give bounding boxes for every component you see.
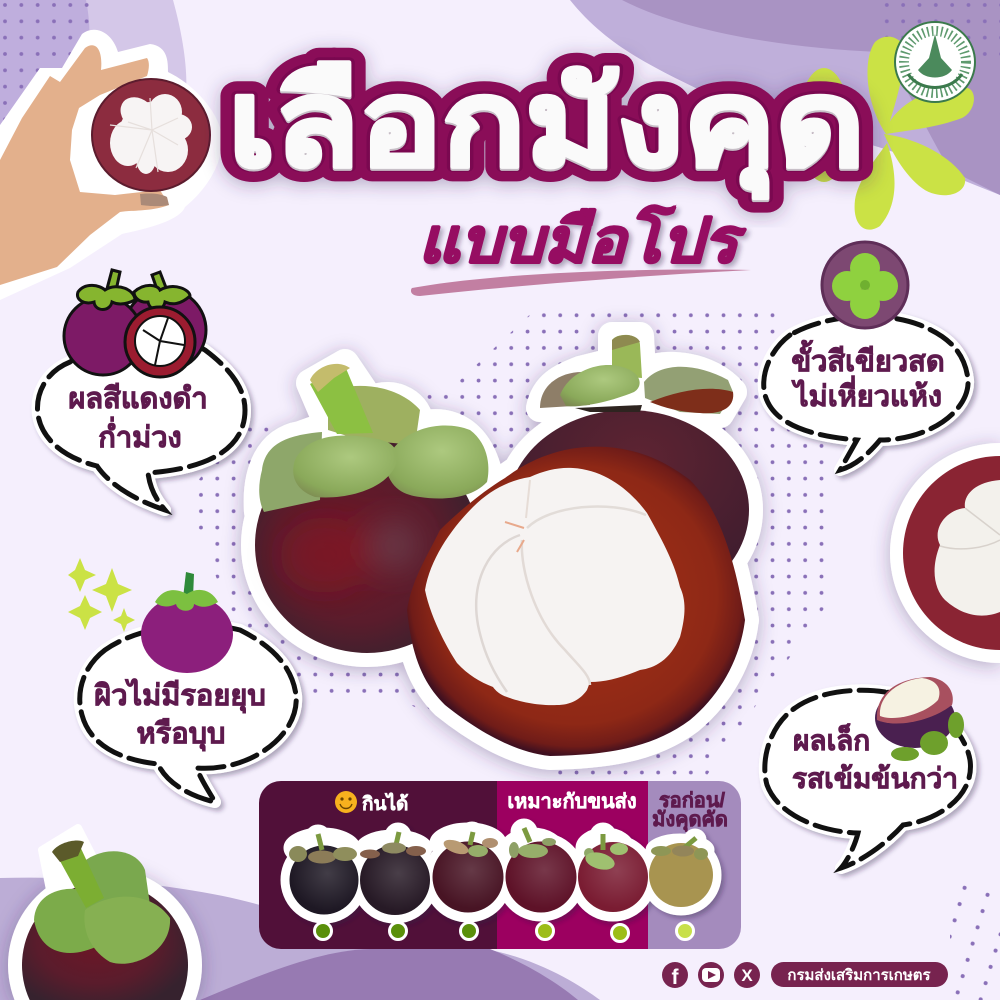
callout: small fruit bbox=[765, 677, 970, 868]
fruit stems bbox=[318, 828, 696, 850]
callout: green stem bbox=[764, 242, 968, 470]
white flesh bbox=[425, 468, 684, 705]
fruit bodies bbox=[290, 842, 713, 915]
icon: two mangosteens bbox=[64, 270, 206, 377]
label: wait / sorted: รอก่อน/ bbox=[659, 790, 725, 812]
fruit calyxes bbox=[289, 837, 708, 873]
ripeness dots bbox=[314, 922, 694, 942]
callout text: ขั้วสีเขียวสด bbox=[791, 339, 945, 378]
right cut fruit sticker bbox=[890, 443, 1000, 663]
footer social icons bbox=[662, 962, 760, 989]
white sticker backing bbox=[282, 820, 720, 922]
main mangosteen photo bbox=[255, 335, 749, 756]
title: เลือกมังคุด bbox=[228, 57, 865, 199]
background blobs top-right bbox=[570, 0, 1000, 195]
callout text: ผิวไม่มีรอยยุบ bbox=[94, 678, 266, 713]
back calyx bbox=[540, 335, 733, 414]
label: for shipping: เหมาะกับขนส่ง bbox=[507, 791, 637, 813]
cut fruit in hand bbox=[92, 79, 210, 191]
icon: whole mangosteen bbox=[141, 572, 233, 673]
dot field behind main fruit bbox=[190, 305, 1000, 1000]
callout text: ผลสีแดงดำ bbox=[68, 383, 208, 415]
callout text: ไม่เหี่ยวแห้ง bbox=[791, 375, 942, 413]
icon: cut mangosteen bbox=[875, 677, 964, 761]
panel segments bbox=[259, 781, 741, 949]
callout text: ก่ำม่วง bbox=[98, 416, 182, 454]
label: wait / sorted: มังคุดคัด bbox=[652, 809, 728, 832]
callout text: หรือบุบ bbox=[137, 718, 225, 751]
agency emblem bbox=[895, 22, 975, 102]
left fruit calyx bbox=[259, 364, 488, 512]
lime petals behind title bbox=[798, 37, 974, 230]
sticker outline bbox=[255, 336, 749, 756]
sparkles bbox=[68, 558, 135, 632]
hand holding cut mangosteen bbox=[0, 30, 222, 300]
callout: skin bbox=[80, 572, 296, 802]
icon: green clover on fruit bbox=[822, 242, 908, 328]
icon: smile bbox=[335, 791, 357, 813]
subtitle: แบบมือโปร bbox=[418, 204, 747, 276]
red cut rind bbox=[407, 447, 745, 756]
callout: fruit colour bbox=[37, 270, 245, 510]
background blobs bottom bbox=[0, 878, 600, 1000]
ripeness fruit row bbox=[282, 820, 720, 922]
ripeness panel bbox=[259, 781, 741, 949]
background blobs top-left bbox=[0, 0, 186, 240]
label: edible: กินได้ bbox=[362, 792, 408, 815]
icon: facebook: f bbox=[672, 966, 680, 989]
left fruit body bbox=[255, 437, 479, 653]
bottom-left fruit sticker bbox=[8, 828, 202, 1000]
brush underline bbox=[411, 270, 751, 296]
footer agency pill: กรมส่งเสริมการเกษตร bbox=[787, 966, 932, 984]
callout text: รสเข้มข้นกว่า bbox=[792, 763, 958, 794]
callout text: ผลเล็ก bbox=[793, 723, 870, 756]
icon: youtube bbox=[698, 962, 724, 988]
icon: X: X bbox=[741, 966, 753, 985]
back fruit bbox=[507, 410, 749, 610]
title: เลือกมังคุด bbox=[228, 57, 865, 199]
title: เลือกมังคุด bbox=[228, 57, 865, 199]
title: เลือกมังคุด bbox=[228, 59, 865, 201]
skin mottling bbox=[280, 517, 419, 593]
footer agency pill bbox=[771, 962, 948, 987]
